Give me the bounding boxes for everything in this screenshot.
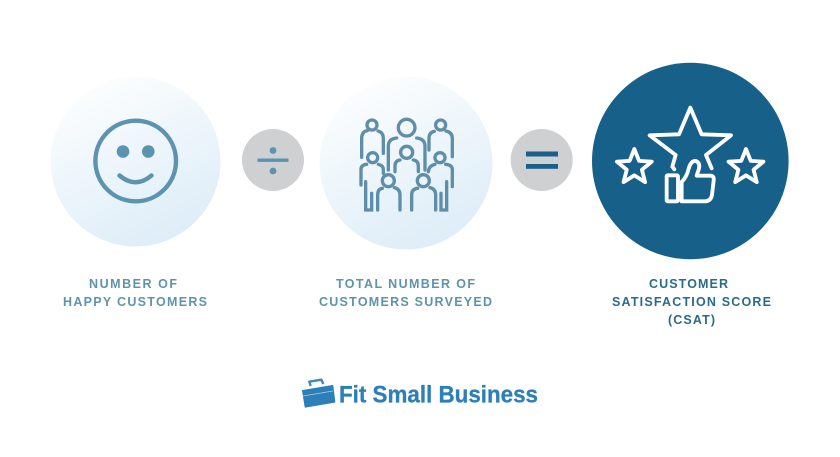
label: number of happy customers xyxy=(63,277,207,309)
operator: divide xyxy=(242,129,304,191)
circle: CSAT background xyxy=(592,63,789,259)
label: number of happy customers: NUMBER OF xyxy=(89,277,177,291)
logo: Fit Small Business xyxy=(303,380,538,408)
panel: number of happy customers xyxy=(50,76,220,309)
label: total number of customers surveyed: CUSTOMERS SURVEYED xyxy=(319,295,492,309)
label: total number of customers surveyed xyxy=(319,277,492,309)
circle: happy customers background xyxy=(50,76,220,246)
icon: smiley face xyxy=(95,121,176,201)
wordmark: Fit Small Business xyxy=(339,382,538,408)
label: number of happy customers: HAPPY CUSTOMERS xyxy=(63,295,207,309)
label: customer satisfaction score: CUSTOMER xyxy=(649,277,728,291)
panel: total number of customers surveyed xyxy=(319,76,492,309)
label: total number of customers surveyed: TOTAL NUMBER OF xyxy=(336,277,475,291)
label: customer satisfaction score xyxy=(612,277,771,327)
icon: group of people xyxy=(361,119,452,210)
label: customer satisfaction score: (CSAT) xyxy=(668,313,715,327)
icon: stars and thumbs up xyxy=(617,108,763,201)
icon: briefcase xyxy=(303,380,335,407)
circle: total customers background xyxy=(320,76,492,250)
label: customer satisfaction score: SATISFACTION SCORE xyxy=(612,295,771,309)
operator: equals xyxy=(511,129,573,191)
panel: customer satisfaction score xyxy=(592,63,789,327)
